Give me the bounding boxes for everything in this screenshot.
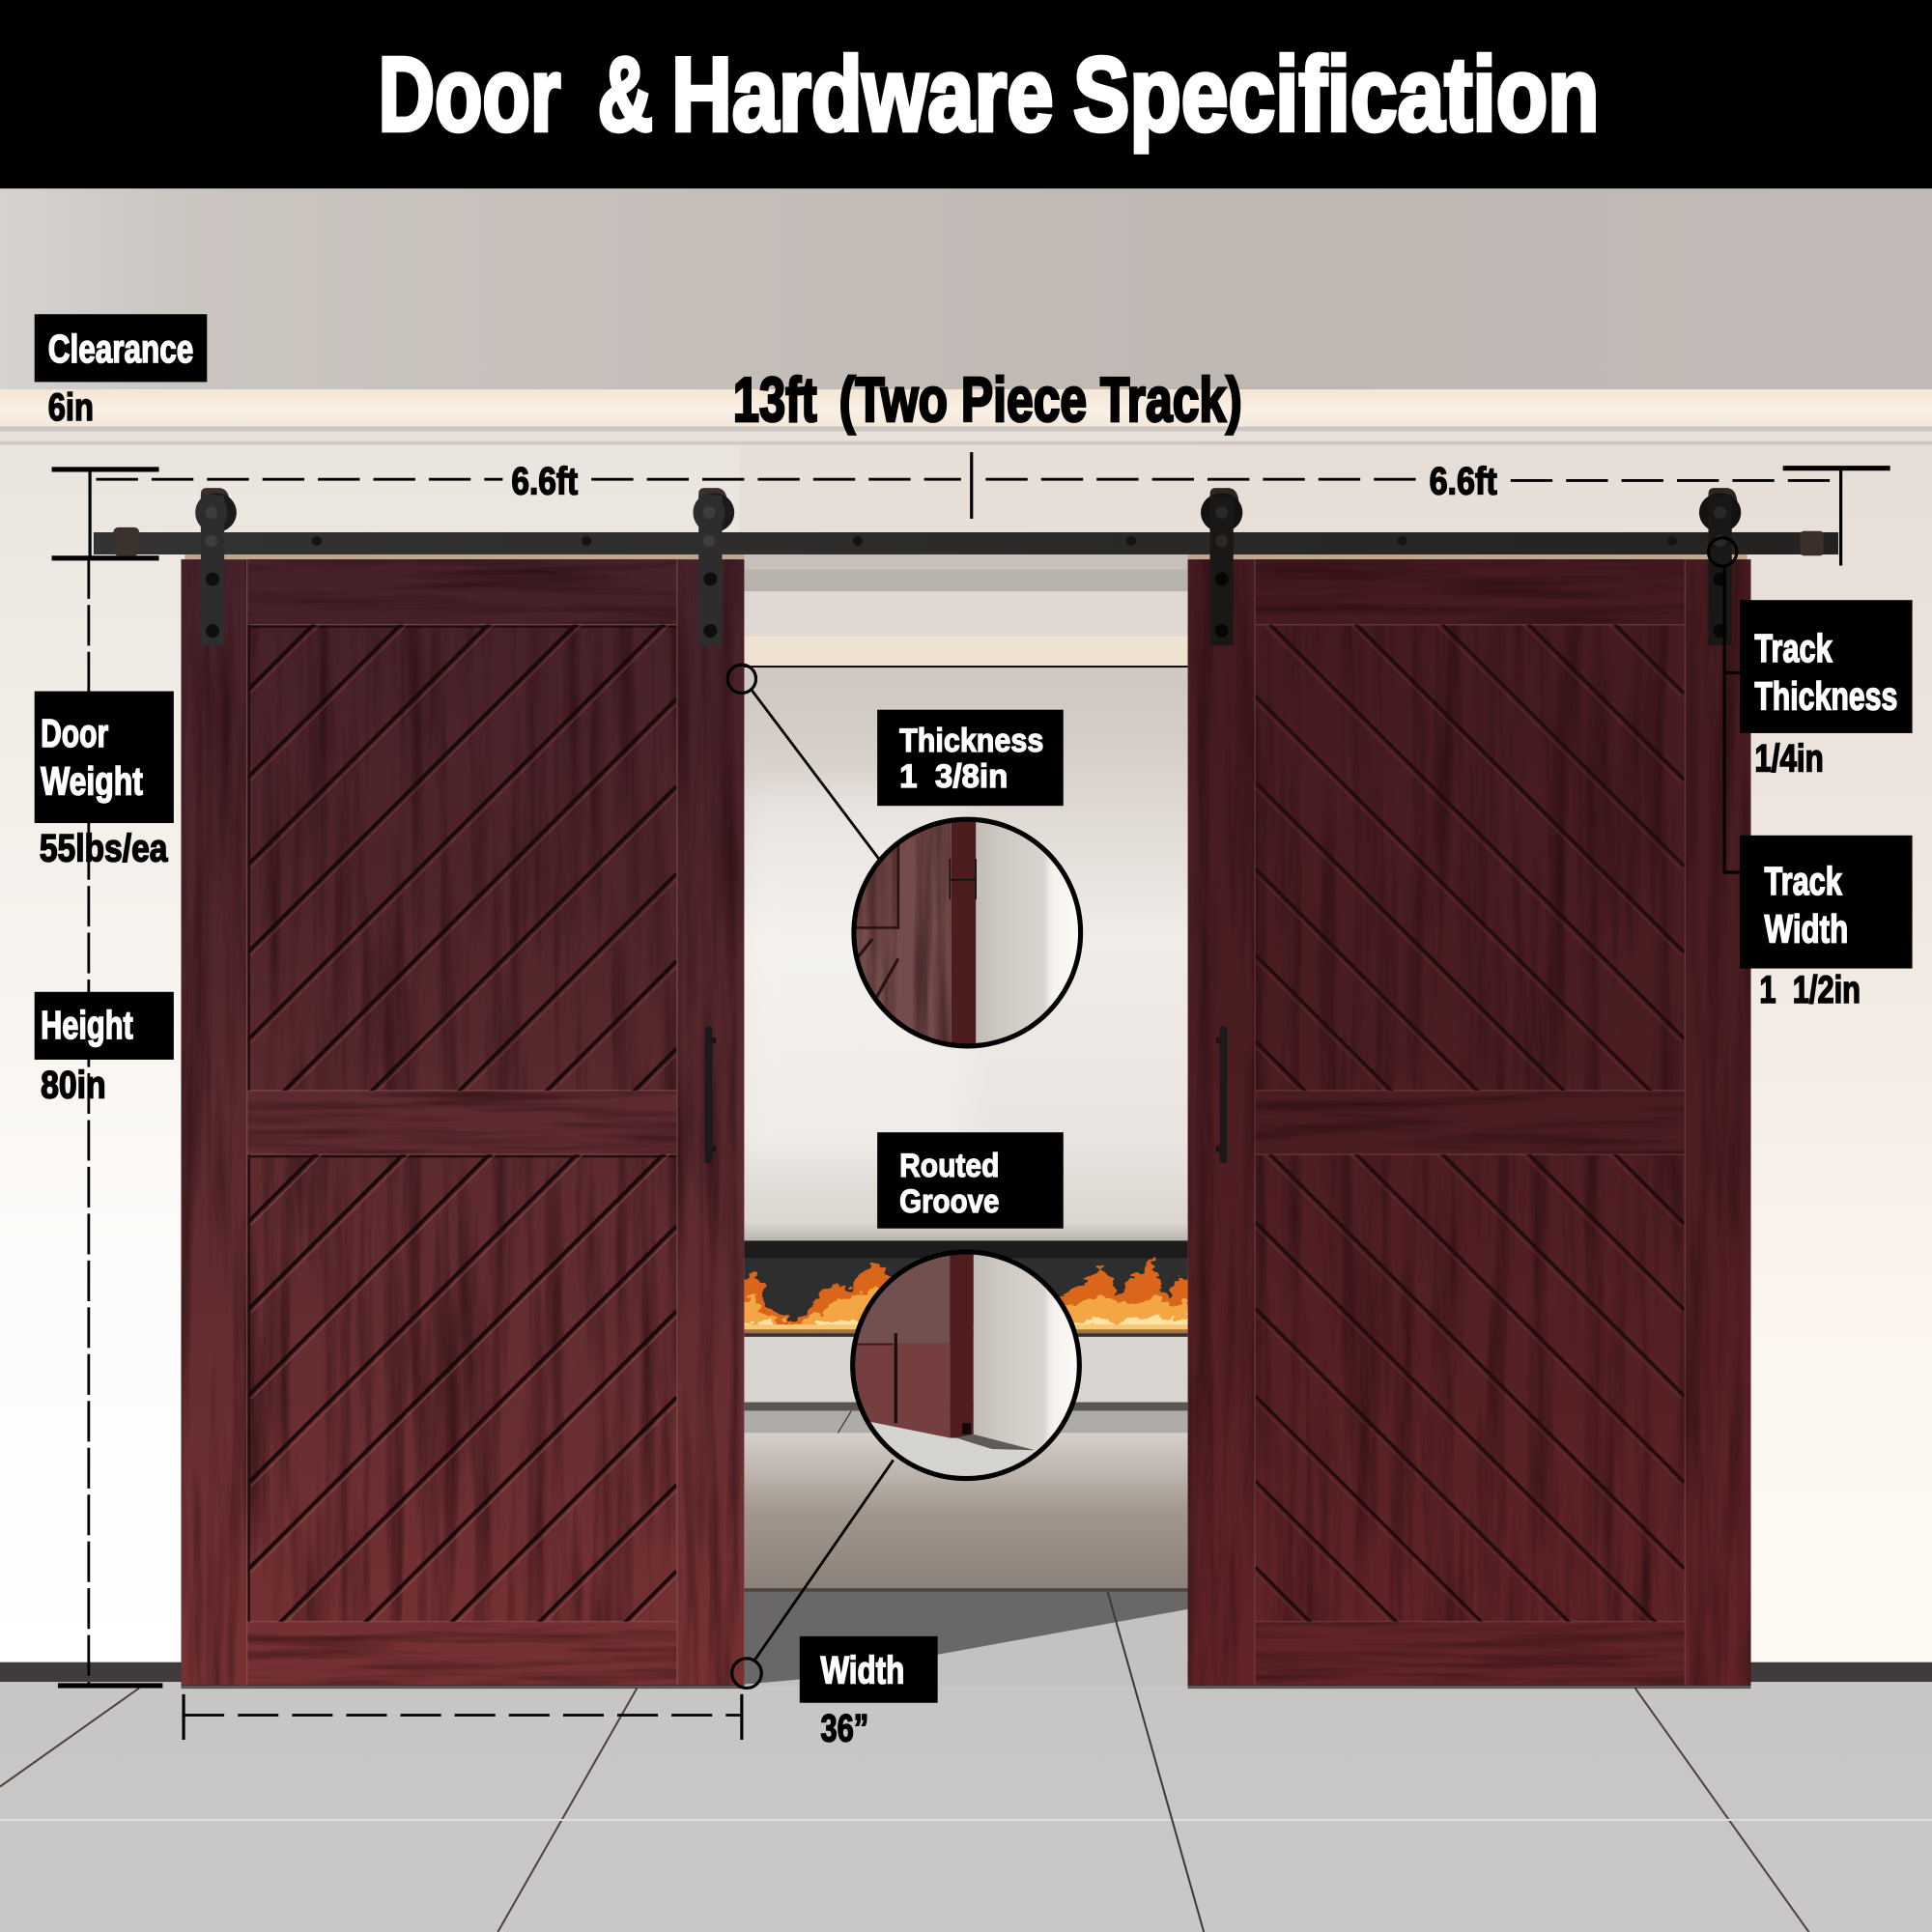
label: right track section: 6.6ft [1430, 460, 1497, 502]
callout: width [800, 1636, 938, 1749]
callout: door thickness: 1 3/8in [899, 758, 1008, 795]
heading: track length: (Two Piece Track) [839, 364, 1242, 435]
header bar [0, 0, 1932, 188]
callout: height: Height [41, 1003, 133, 1047]
hanger strap 2 [693, 488, 734, 645]
heading: track length: 13ft [733, 364, 817, 435]
callout: track width [1740, 836, 1913, 1011]
label: left track section: 6.6ft [511, 460, 578, 502]
interior wall [744, 569, 1188, 1242]
left wall [0, 444, 744, 1662]
right wall [1188, 444, 1932, 1662]
callout leader lines [727, 538, 1740, 1688]
rails right door [1255, 559, 1685, 1686]
wood grain right door [1188, 559, 1750, 1686]
fireplace strip [744, 1240, 1188, 1329]
width line [732, 1659, 761, 1688]
floor tile joints [0, 1688, 1932, 1932]
callout: door weight: 55lbs/ea [40, 828, 168, 870]
title: Specification [1073, 36, 1600, 153]
sliding track [94, 527, 1838, 569]
panel: left barn door [182, 559, 744, 1686]
callout: clearance: Clearance [48, 327, 193, 371]
wood grain left door [182, 559, 744, 1686]
callout: door thickness [877, 710, 1064, 806]
diagonal grooves upper left [247, 624, 676, 1091]
floor [0, 1682, 1932, 1932]
callout: height: 80in [41, 1064, 106, 1106]
panel: right barn door [1188, 559, 1750, 1686]
door floor shadows [182, 1686, 1750, 1689]
door handle left [705, 1026, 716, 1163]
ceiling wall [0, 188, 1932, 390]
door handle right [1216, 1026, 1227, 1163]
callout: track thickness: 1/4in [1754, 737, 1824, 780]
baseboard [0, 1662, 1932, 1683]
diagonal grooves upper right [1256, 624, 1685, 1091]
title: & [598, 36, 653, 153]
callout: track thickness: Track [1754, 626, 1833, 670]
hanger strap 1 [195, 488, 237, 645]
title: Door [379, 36, 560, 153]
title: Hardware [671, 36, 1054, 153]
doorway opening view [734, 569, 1204, 1932]
track stopper right [1801, 531, 1824, 555]
rails left door [247, 559, 677, 1686]
fireplace ledge [744, 1329, 1188, 1333]
dark floor shadow [744, 1592, 1188, 1685]
heading: track length [733, 364, 1242, 435]
magnifier: door thickness detail [850, 813, 1087, 1054]
diagonal grooves lower left [247, 1154, 676, 1622]
title [379, 36, 1600, 153]
callout: door weight [35, 692, 174, 870]
diagonal grooves lower right [1256, 1154, 1685, 1622]
callout: track width: Width [1765, 907, 1848, 952]
callout: height [35, 992, 174, 1106]
cove light band [0, 389, 1932, 426]
callout: routed groove: Groove [899, 1183, 999, 1220]
opening floor [744, 1592, 1188, 1686]
dimension: track total lines [52, 452, 1890, 1740]
callout: routed groove: Routed [899, 1148, 999, 1184]
callout: track thickness [1740, 600, 1913, 780]
callout: clearance [35, 314, 207, 429]
carpet [744, 1433, 1188, 1591]
hanger strap 4 [1699, 488, 1741, 645]
callout: door weight: Weight [41, 759, 143, 804]
track leader [1708, 538, 1737, 566]
callout: width: Width [820, 1649, 904, 1691]
flames [734, 1262, 1198, 1337]
magnifier: routed groove detail [850, 1247, 1087, 1488]
callout: door weight: Door [41, 711, 108, 755]
track stopper left [113, 527, 139, 555]
thickness line [744, 666, 1188, 668]
callout: track width: 1 1/2in [1759, 969, 1861, 1011]
callout: width: 36” [820, 1707, 868, 1749]
callout: door thickness: Thickness [899, 723, 1043, 759]
callout: routed groove [877, 1132, 1064, 1229]
hanger strap 3 [1201, 488, 1242, 645]
concrete hearth [744, 1337, 1188, 1403]
callout: track width: Track [1765, 859, 1842, 903]
callout: clearance: 6in [48, 386, 94, 429]
track bolts [312, 536, 1677, 546]
